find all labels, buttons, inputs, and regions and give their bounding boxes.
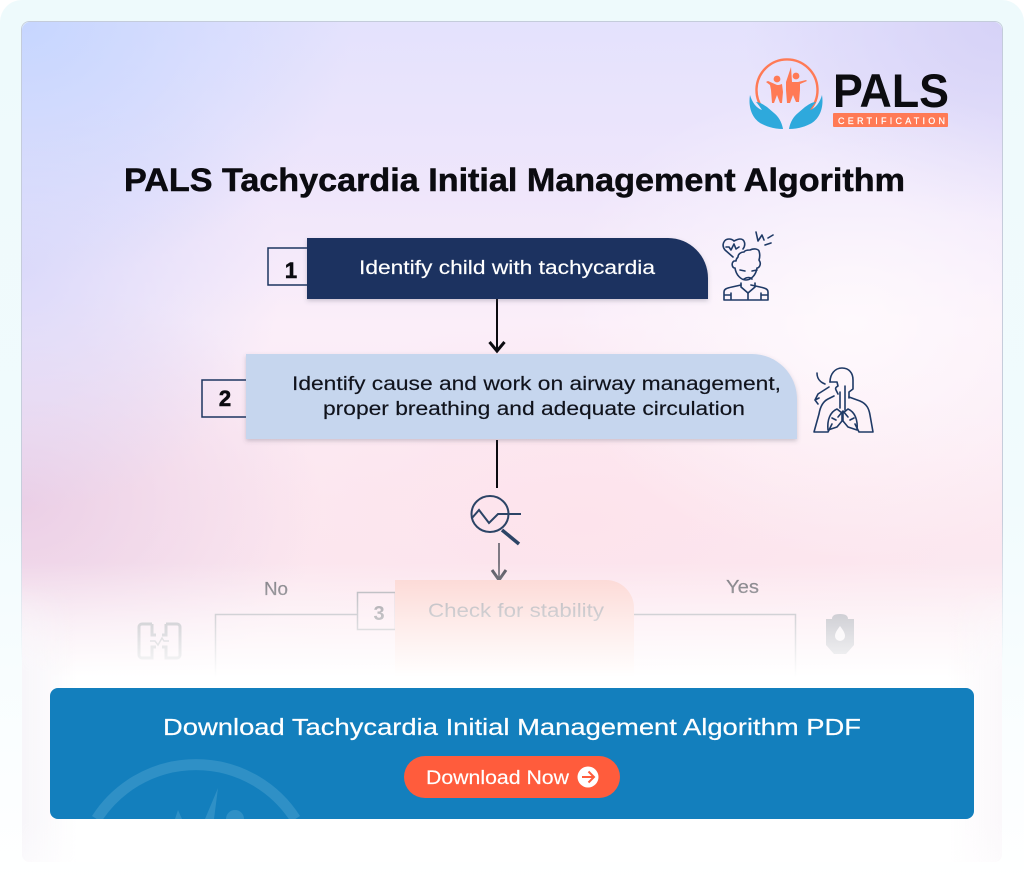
arrow: step 1 to step 2 (490, 299, 504, 352)
no label: No (264, 579, 288, 599)
no connector (216, 614, 357, 680)
panel: download banner (50, 688, 974, 819)
step 1 number (268, 248, 308, 285)
panel: white fade over lower flowchart (22, 568, 1002, 862)
watermark logo (92, 759, 300, 819)
banner heading: Download Tachycardia Initial Management Algorithm PDF (163, 714, 861, 740)
step 2 (202, 354, 797, 439)
step 2 text (292, 374, 781, 420)
step 2 number (202, 380, 247, 417)
logo wordmark: PALS (833, 64, 949, 117)
icon: distressed child (723, 232, 773, 300)
arrow: magnifier to step 3 (492, 543, 506, 581)
line: step 2 to magnifier (496, 440, 498, 488)
button: download now: Download Now (426, 768, 569, 789)
icon: lungs and airway (814, 368, 873, 432)
yes branch (634, 577, 796, 680)
logo hands (750, 95, 822, 129)
yes label: Yes (726, 577, 759, 597)
icon: IV bag (826, 614, 854, 654)
logo ring (756, 59, 817, 110)
step 3 number: 3 (373, 603, 385, 625)
logo figures (766, 67, 807, 103)
button: download now (404, 756, 620, 798)
step 2 text: Identify cause and work on airway management, (292, 374, 781, 395)
step 1 box (307, 238, 708, 299)
step 2 box (246, 354, 797, 439)
step 3 (358, 580, 634, 690)
step 2 number: 2 (219, 386, 231, 411)
logo tagline (833, 113, 948, 127)
icon: monitor (139, 624, 180, 658)
logo tagline: CERTIFICATION (838, 116, 945, 126)
step 1 number: 1 (285, 258, 297, 283)
step 3 text: Check for stability (428, 601, 605, 622)
yes connector (634, 614, 796, 680)
step 3 box (395, 580, 634, 690)
step 2 text: proper breathing and adequate circulation (323, 399, 745, 420)
step 1 text: Identify child with tachycardia (359, 258, 656, 279)
no branch (216, 579, 357, 680)
logo (750, 59, 949, 129)
title: PALS Tachycardia Initial Management Algorithm (124, 162, 905, 198)
icon: magnifier with waveform (472, 496, 521, 544)
step 1 (268, 238, 708, 299)
step 3 number (358, 592, 396, 630)
